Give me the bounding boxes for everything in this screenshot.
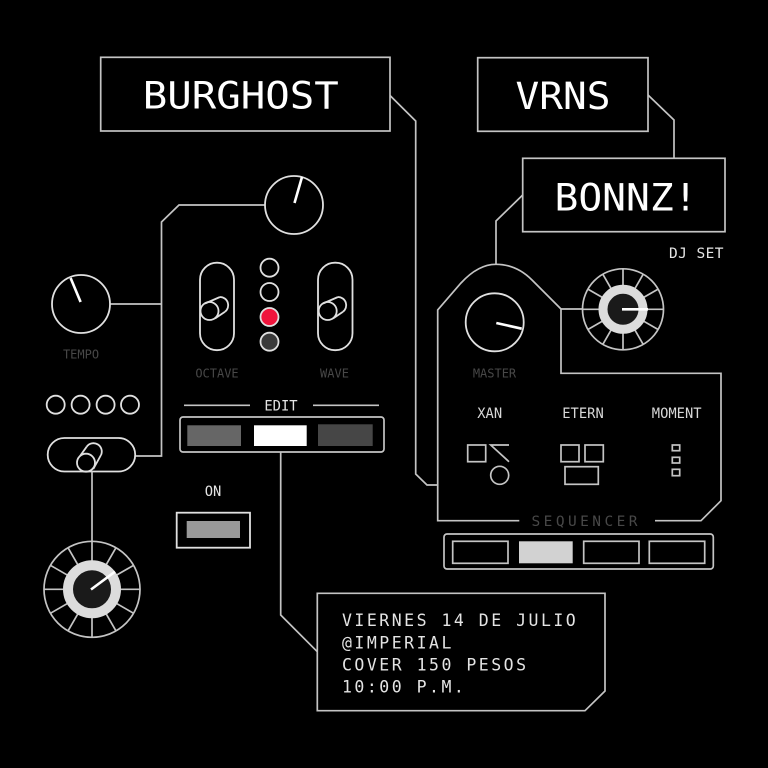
label: sequencer: SEQUENCER	[532, 514, 638, 530]
dial: left	[44, 541, 140, 637]
connector: BONNZ! to master panel	[496, 195, 523, 264]
info box: 10:00 P.M.	[342, 678, 466, 697]
dial: right	[582, 269, 664, 350]
channel: ETERN: ETERN	[562, 406, 604, 422]
slider: wave	[318, 263, 352, 350]
act box: BONNZ!	[523, 158, 725, 232]
connector: VRNS to BONNZ!	[648, 95, 674, 158]
knob: tempo	[52, 275, 110, 333]
label: octave: OCTAVE	[195, 366, 239, 380]
knob: master	[466, 293, 524, 351]
edit selector	[180, 417, 384, 452]
act box: VRNS	[478, 58, 648, 131]
panel outline	[438, 264, 721, 521]
channel: MOMENT: MOMENT	[652, 406, 702, 422]
four round buttons	[47, 396, 139, 414]
channel: MOMENT	[652, 406, 702, 476]
slider: octave	[200, 263, 234, 350]
connector: master panel to dial	[561, 308, 583, 310]
channel: ETERN	[561, 406, 604, 484]
act box: BURGHOST: BURGHOST	[143, 74, 339, 117]
edit heading: EDIT	[264, 398, 298, 414]
info box: @IMPERIAL	[342, 633, 454, 652]
label: master: MASTER	[473, 366, 517, 380]
info box: VIERNES 14 DE JULIO	[342, 611, 578, 630]
connector: top knob to toggle	[136, 205, 265, 456]
indicator lights	[260, 259, 278, 351]
connector: slider to dial	[91, 472, 93, 541]
act box: VRNS: VRNS	[516, 75, 610, 118]
horizontal slider	[48, 438, 135, 472]
info box: COVER 150 PESOS	[342, 656, 529, 675]
info box	[317, 593, 605, 711]
sequencer steps	[444, 534, 713, 569]
on switch	[177, 513, 250, 548]
act box: BONNZ!: BONNZ!	[554, 176, 698, 220]
act box: BURGHOST	[101, 57, 390, 131]
channel: XAN: XAN	[477, 406, 502, 422]
connector: edit selector to info box	[281, 452, 317, 652]
knob: top	[265, 176, 323, 234]
DJ set label: DJ SET	[669, 246, 724, 262]
label: on: ON	[205, 484, 221, 500]
connector: tempo knob	[110, 303, 162, 305]
connector: BURGHOST to master panel	[390, 96, 438, 485]
panel: left controls	[44, 176, 384, 637]
label: wave: WAVE	[320, 366, 349, 380]
channel: XAN	[468, 406, 509, 484]
label: tempo: TEMPO	[63, 347, 99, 361]
panel: master and sequencer	[438, 264, 721, 569]
